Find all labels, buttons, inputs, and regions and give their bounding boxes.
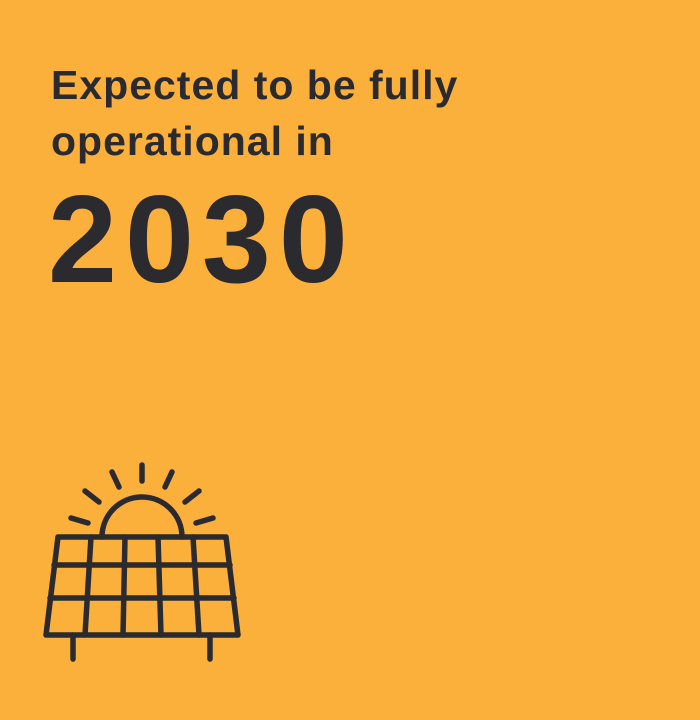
title: operational in [51,118,334,164]
year: 2030 [48,171,356,309]
title: Expected to be fully [51,62,458,108]
title [51,62,458,164]
